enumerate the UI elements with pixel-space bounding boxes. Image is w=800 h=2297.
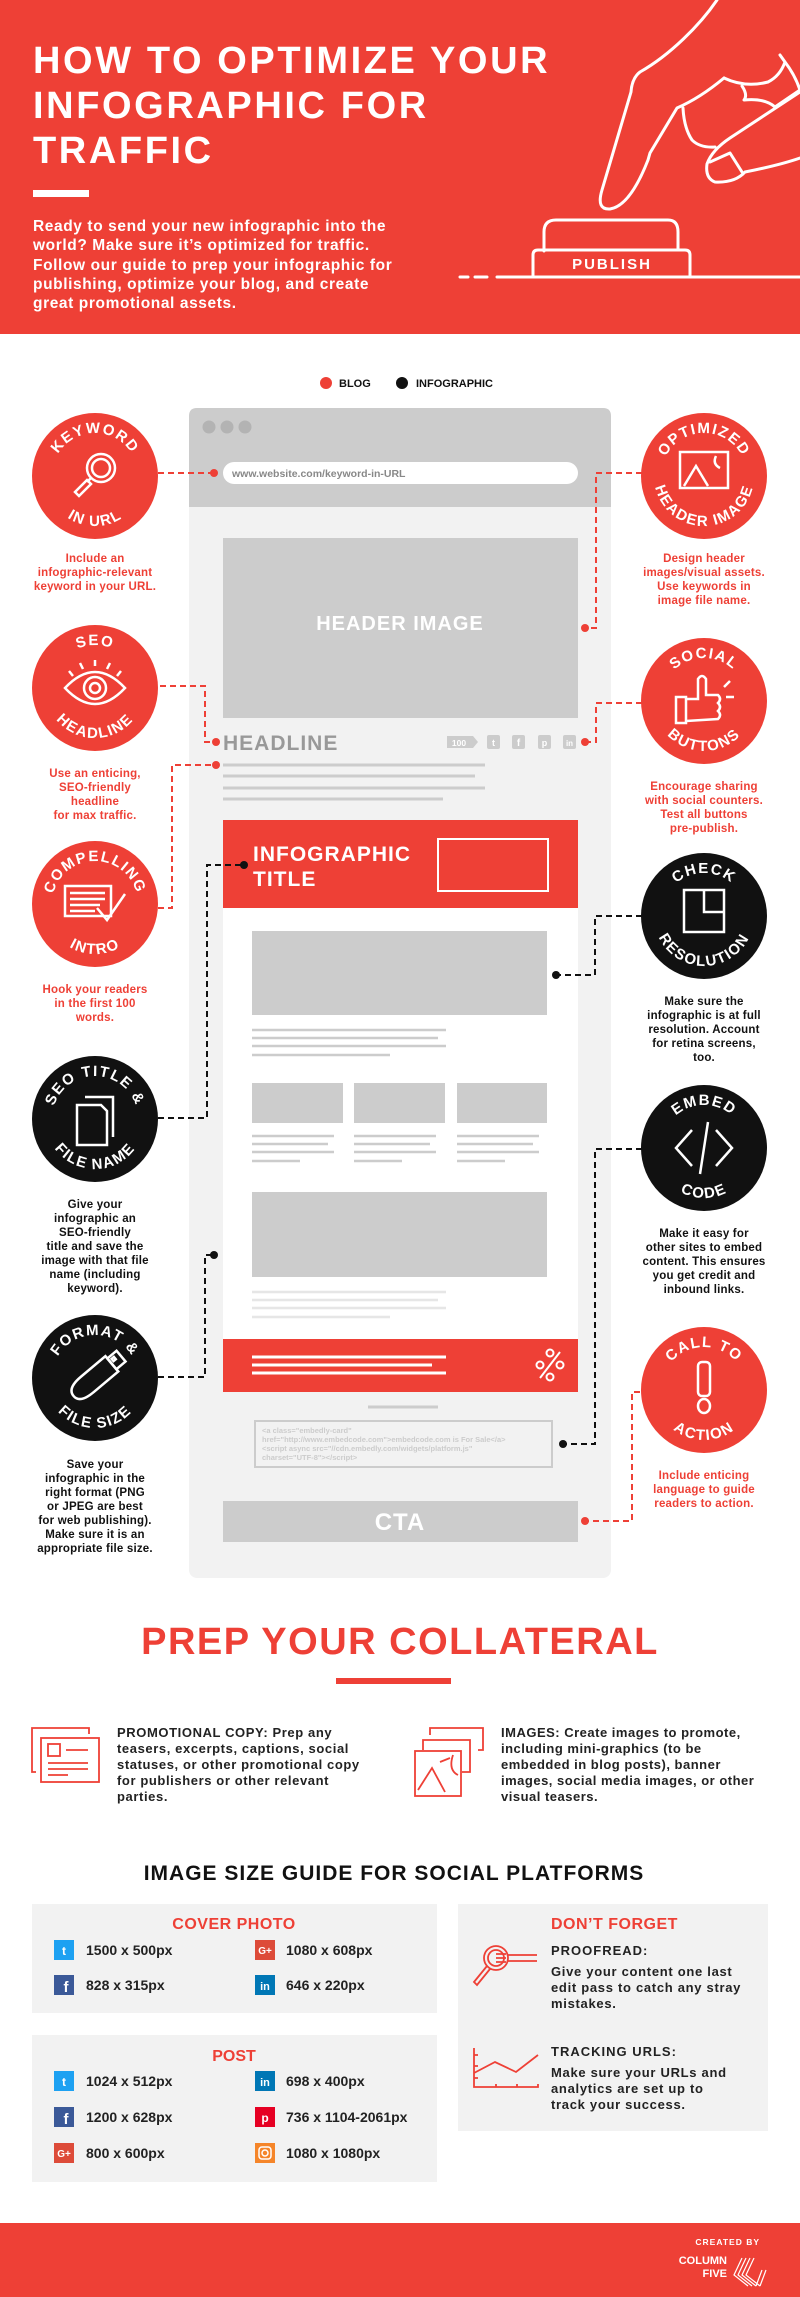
badge: compelling intro: INTRO	[70, 938, 118, 954]
embed code box	[255, 1421, 552, 1467]
panel: don't forget: mistakes.	[551, 1996, 617, 2011]
intro paragraph: Ready to send your new infographic into the	[33, 218, 386, 235]
descriptions: in the first 100	[54, 998, 136, 1010]
headline row with social counters: p	[542, 738, 548, 748]
badge: SEO title & file name: SEO TITLE &	[46, 1066, 144, 1105]
badge: social buttons	[641, 638, 767, 764]
title: HOW TO OPTIMIZE YOUR	[33, 40, 550, 82]
panel: cover photo: G+	[258, 1946, 272, 1957]
descriptions: Encourage sharing	[650, 781, 758, 793]
infographic title block: INFOGRAPHIC	[253, 843, 411, 866]
footer	[0, 2223, 800, 2297]
descriptions: Save your	[67, 1459, 124, 1471]
descriptions: SEO-friendly	[59, 782, 131, 794]
panel: don't forget: TRACKING URLS:	[551, 2044, 677, 2059]
footer: COLUMN	[679, 2255, 727, 2267]
descriptions: Make it easy for	[659, 1228, 749, 1240]
CTA block: CTA	[375, 1509, 425, 1536]
headline row with social counters: HEADLINE	[223, 732, 338, 755]
descriptions: images/visual assets.	[643, 567, 765, 579]
badge: compelling intro: COMPELLING	[44, 850, 145, 892]
panel: cover photo: f	[64, 1979, 70, 1996]
descriptions: infographic in the	[45, 1473, 145, 1485]
heading: image size guide: IMAGE SIZE GUIDE FOR SOCIAL PLATFORMS	[144, 1862, 644, 1885]
panel: don't forget: edit pass to catch any stray	[551, 1980, 741, 1995]
promotional copy item: PROMOTIONAL COPY: Prep any	[117, 1725, 332, 1740]
badge: SEO headline	[32, 625, 158, 751]
badge: optimized header image: HEADER IMAGE	[655, 484, 752, 526]
badge: SEO title & file name	[32, 1056, 158, 1182]
descriptions: Use keywords in	[657, 581, 751, 593]
descriptions: keyword).	[67, 1283, 123, 1295]
panel: don't forget: analytics are set up to	[551, 2081, 704, 2096]
images item: visual teasers.	[501, 1789, 598, 1804]
browser mockup	[189, 408, 611, 1578]
badge: SEO headline: SEO	[76, 634, 112, 648]
promotional copy item: teasers, excerpts, captions, social	[117, 1741, 349, 1756]
intro paragraph: Follow our guide to prep your infographic for	[33, 257, 392, 274]
descriptions: infographic is at full	[647, 1010, 761, 1022]
legend: INFOGRAPHIC	[416, 378, 493, 390]
embed code box: charset="UTF-8"></script>	[262, 1453, 358, 1462]
descriptions: Hook your readers	[42, 984, 148, 996]
panel: post	[32, 2035, 437, 2182]
badge: embed code: EMBED	[670, 1094, 735, 1115]
headline row with social counters: t	[492, 738, 495, 748]
badge: call to action: ACTION	[673, 1422, 733, 1440]
panel: cover photo: 646 x 220px	[286, 1977, 365, 1993]
badge: format & file size: FILE SIZE	[58, 1404, 131, 1428]
descriptions: resolution. Account	[648, 1024, 760, 1036]
embed code box: href="http://www.embedcode.com">embedcode.com is For Sale</a>	[262, 1435, 506, 1444]
panel: cover photo	[32, 1904, 437, 2013]
panel: post: 1080 x 1080px	[286, 2145, 380, 2161]
panel: cover photo: 1500 x 500px	[86, 1942, 173, 1958]
descriptions: title and save the	[47, 1241, 143, 1253]
panel: don't forget: Give your content one last	[551, 1964, 732, 1979]
panel: don't forget: Make sure your URLs and	[551, 2065, 727, 2080]
title	[33, 40, 550, 172]
descriptions: headline	[71, 796, 119, 808]
panel: post: in	[260, 2077, 270, 2089]
panel: post: 1200 x 628px	[86, 2109, 173, 2125]
intro paragraph: publishing, optimize your blog, and create	[33, 276, 369, 293]
badge: SEO headline: HEADLINE	[56, 713, 132, 738]
illustration: finger pressing publish button	[460, 0, 800, 277]
section heading: prep your collateral: PREP YOUR COLLATERAL	[141, 1621, 659, 1663]
panel: cover photo: 828 x 315px	[86, 1977, 165, 1993]
legend	[320, 377, 493, 390]
badge: social buttons: BUTTONS	[668, 728, 738, 751]
descriptions: language to guide	[653, 1484, 755, 1496]
descriptions: pre-publish.	[670, 823, 738, 835]
title: TRAFFIC	[33, 130, 214, 172]
descriptions: for max traffic.	[53, 810, 137, 822]
badge: embed code: CODE	[682, 1184, 726, 1198]
descriptions: Design header	[663, 553, 745, 565]
descriptions: inbound links.	[664, 1284, 744, 1296]
connectors	[158, 473, 642, 1521]
panel: post: POST	[212, 2048, 256, 2065]
infographic title block	[223, 820, 578, 908]
promotional copy item: parties.	[117, 1789, 168, 1804]
descriptions: too.	[693, 1052, 715, 1064]
title: INFOGRAPHIC FOR	[33, 85, 429, 127]
badge: SEO title & file name: FILE NAME	[55, 1142, 134, 1170]
descriptions: you get credit and	[653, 1270, 755, 1282]
infographic footer block	[223, 1339, 578, 1392]
descriptions: other sites to embed	[646, 1242, 762, 1254]
panel: don't forget: DON’T FORGET	[551, 1916, 678, 1933]
CTA block	[223, 1501, 578, 1542]
descriptions	[34, 553, 766, 1555]
images item: including mini-graphics (to be	[501, 1741, 702, 1756]
descriptions: Give your	[68, 1199, 123, 1211]
descriptions: readers to action.	[654, 1498, 754, 1510]
headline row with social counters: f	[517, 738, 521, 749]
images item: images, social media images, or other	[501, 1773, 754, 1788]
descriptions: appropriate file size.	[37, 1543, 153, 1555]
descriptions: name (including	[49, 1269, 141, 1281]
headline row with social counters: 100	[452, 738, 466, 748]
legend: BLOG	[339, 378, 371, 390]
descriptions: keyword in your URL.	[34, 581, 156, 593]
badge: check resolution	[641, 853, 767, 979]
descriptions: for web publishing).	[38, 1515, 152, 1527]
descriptions: content. This ensures	[642, 1256, 766, 1268]
images item: embedded in blog posts), banner	[501, 1757, 721, 1772]
panel: don't forget	[458, 1904, 768, 2131]
panel: cover photo: 1080 x 608px	[286, 1942, 373, 1958]
badge: keyword in URL: KEYWORD	[50, 422, 138, 453]
badge: compelling intro	[32, 841, 158, 967]
panel: don't forget: PROOFREAD:	[551, 1943, 648, 1958]
url bar: www.website.com/keyword-in-URL	[231, 468, 406, 480]
descriptions: Include enticing	[659, 1470, 749, 1482]
descriptions: image file name.	[658, 595, 750, 607]
panel: post: 698 x 400px	[286, 2073, 365, 2089]
embed code box: <a class="embedly-card"	[262, 1426, 352, 1435]
header image placeholder: HEADER IMAGE	[316, 613, 484, 635]
badge: keyword in URL: IN URL	[68, 509, 122, 526]
descriptions: words.	[75, 1012, 114, 1024]
badge: format & file size: FORMAT &	[50, 1324, 138, 1356]
badge: embed code	[641, 1085, 767, 1211]
descriptions: right format (PNG	[45, 1487, 145, 1499]
panel: cover photo: t	[62, 1944, 66, 1958]
descriptions: or JPEG are best	[47, 1501, 143, 1513]
intro paragraph: world? Make sure it’s optimized for traffic.	[32, 237, 370, 254]
descriptions: Include an	[66, 553, 124, 565]
badge: call to action	[641, 1327, 767, 1453]
badge: check resolution: CHECK	[672, 863, 736, 882]
promotional copy item: statuses, or other promotional copy	[117, 1757, 360, 1772]
headline row with social counters: in	[566, 739, 573, 748]
intro paragraph	[32, 218, 392, 312]
badge: check resolution: RESOLUTION	[658, 932, 748, 966]
panel: post: 800 x 600px	[86, 2145, 165, 2161]
descriptions: Test all buttons	[660, 809, 748, 821]
promotional copy item: for publishers or other relevant	[117, 1773, 329, 1788]
panel: post: 736 x 1104-2061px	[286, 2109, 408, 2125]
descriptions: Use an enticing,	[49, 768, 141, 780]
badge: optimized header image	[641, 413, 767, 539]
infographic area	[223, 907, 578, 1339]
panel: cover photo: COVER PHOTO	[172, 1916, 296, 1933]
badge: format & file size	[32, 1315, 158, 1441]
badge: social buttons: SOCIAL	[670, 648, 734, 669]
images item	[415, 1725, 754, 1804]
descriptions: image with that file	[41, 1255, 149, 1267]
panel: post: G+	[57, 2149, 71, 2160]
badge: optimized header image: OPTIMIZED	[658, 422, 748, 454]
panel: post: f	[64, 2111, 70, 2128]
descriptions: Make sure it is an	[45, 1529, 145, 1541]
badge: call to action: CALL TO	[666, 1336, 741, 1360]
descriptions: infographic-relevant	[38, 567, 152, 579]
descriptions: Make sure the	[664, 996, 744, 1008]
panel: post: p	[261, 2111, 269, 2125]
descriptions: for retina screens,	[652, 1038, 756, 1050]
section heading: prep your collateral	[141, 1621, 659, 1684]
descriptions: with social counters.	[644, 795, 763, 807]
infographic title block: TITLE	[253, 868, 316, 891]
headline row with social counters	[223, 732, 576, 755]
images item: IMAGES: Create images to promote,	[501, 1725, 741, 1740]
header banner	[0, 0, 800, 334]
header image placeholder	[223, 538, 578, 718]
url bar	[223, 462, 578, 484]
header banner: PUBLISH	[572, 256, 652, 273]
panel: don't forget: track your success.	[551, 2097, 686, 2112]
panel: post: t	[62, 2075, 66, 2089]
footer: CREATED BY	[695, 2237, 760, 2247]
footer: FIVE	[703, 2268, 727, 2280]
promotional copy item	[32, 1725, 360, 1804]
panel: cover photo: in	[260, 1981, 270, 1993]
descriptions: infographic an	[54, 1213, 136, 1225]
badge: keyword in URL	[32, 413, 158, 539]
descriptions: SEO-friendly	[59, 1227, 131, 1239]
panel: post: 1024 x 512px	[86, 2073, 173, 2089]
embed code box: <script async src="//cdn.embedly.com/widgets/platform.js"	[262, 1444, 473, 1453]
intro paragraph: great promotional assets.	[33, 295, 237, 312]
